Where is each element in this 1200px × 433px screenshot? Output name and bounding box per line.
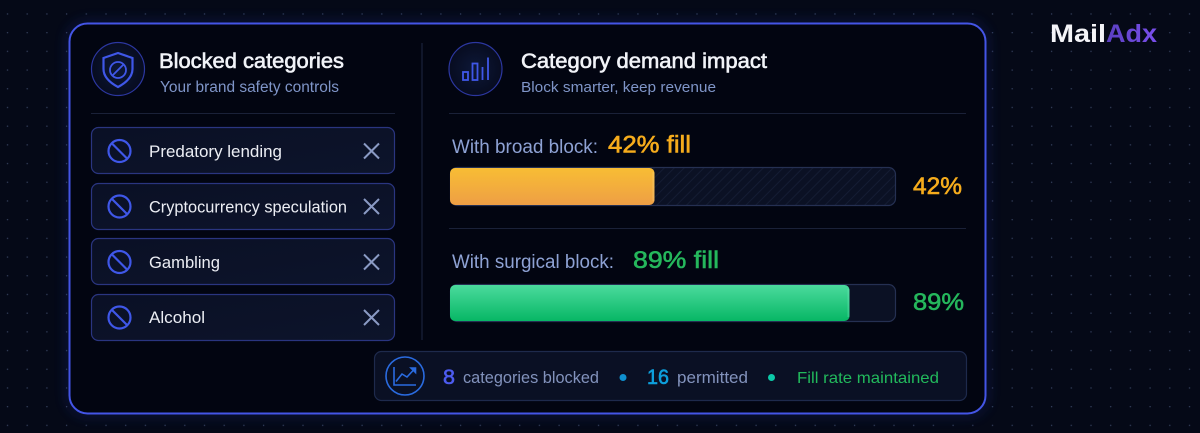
- heading: blocked categories: Blocked categories: [159, 50, 344, 73]
- row: gambling: [92, 238, 394, 284]
- broad block label: 42% fill: [608, 132, 691, 158]
- subheading: category demand impact: Block smarter, keep revenue: [521, 79, 716, 96]
- row: predatory lending: Predatory lending: [149, 143, 282, 161]
- panel: summary strip: [374, 352, 966, 400]
- value: 89%: 89%: [913, 289, 964, 316]
- icon: shield: [92, 42, 144, 96]
- stat: permitted: [647, 366, 748, 389]
- bar chart: surgical block 89%: [450, 284, 896, 322]
- surgical block label: With surgical block:: [452, 252, 614, 273]
- row: gambling: Gambling: [149, 254, 220, 272]
- panel: main card: [70, 24, 986, 414]
- row: alcohol: Alcohol: [149, 309, 205, 327]
- surgical block label: [452, 247, 719, 274]
- row: alcohol: [92, 294, 394, 340]
- status: fill rate maintained: Fill rate maintained: [797, 370, 939, 387]
- surgical block label: 89% fill: [633, 247, 719, 274]
- panel: blocked categories: [91, 42, 395, 340]
- panel: category demand impact: [449, 42, 966, 322]
- logo: MailAdx: [1050, 20, 1157, 48]
- stat: categories blocked: categories blocked: [463, 369, 599, 387]
- icon: bar chart: [449, 42, 502, 96]
- value: 42%: 42%: [913, 173, 962, 200]
- broad block label: [452, 132, 691, 158]
- separator dot: [620, 374, 626, 381]
- icon: trend chart: [386, 357, 424, 395]
- broad block label: With broad block:: [452, 137, 598, 158]
- stat: permitted: permitted: [677, 369, 748, 387]
- row: cryptocurrency speculation: [92, 184, 394, 230]
- row: cryptocurrency speculation: Cryptocurrency speculation: [149, 198, 347, 216]
- row: predatory lending: [92, 128, 394, 174]
- stat: categories blocked: [443, 366, 599, 389]
- logo: MailAdx: Mail: [1050, 20, 1106, 48]
- stat: permitted: 16: [647, 366, 669, 389]
- stat: categories blocked: 8: [443, 366, 455, 389]
- logo: MailAdx: Adx: [1106, 20, 1157, 48]
- heading: category demand impact: Category demand impact: [521, 50, 767, 73]
- separator dot: [768, 374, 775, 381]
- subheading: blocked categories: Your brand safety controls: [160, 79, 339, 96]
- bar chart: broad block 42%: [450, 168, 896, 206]
